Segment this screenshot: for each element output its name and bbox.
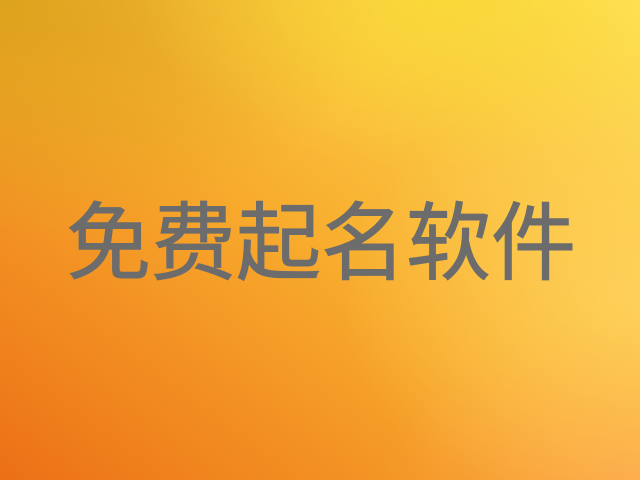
title: 免费起名软件 <box>66 197 576 292</box>
